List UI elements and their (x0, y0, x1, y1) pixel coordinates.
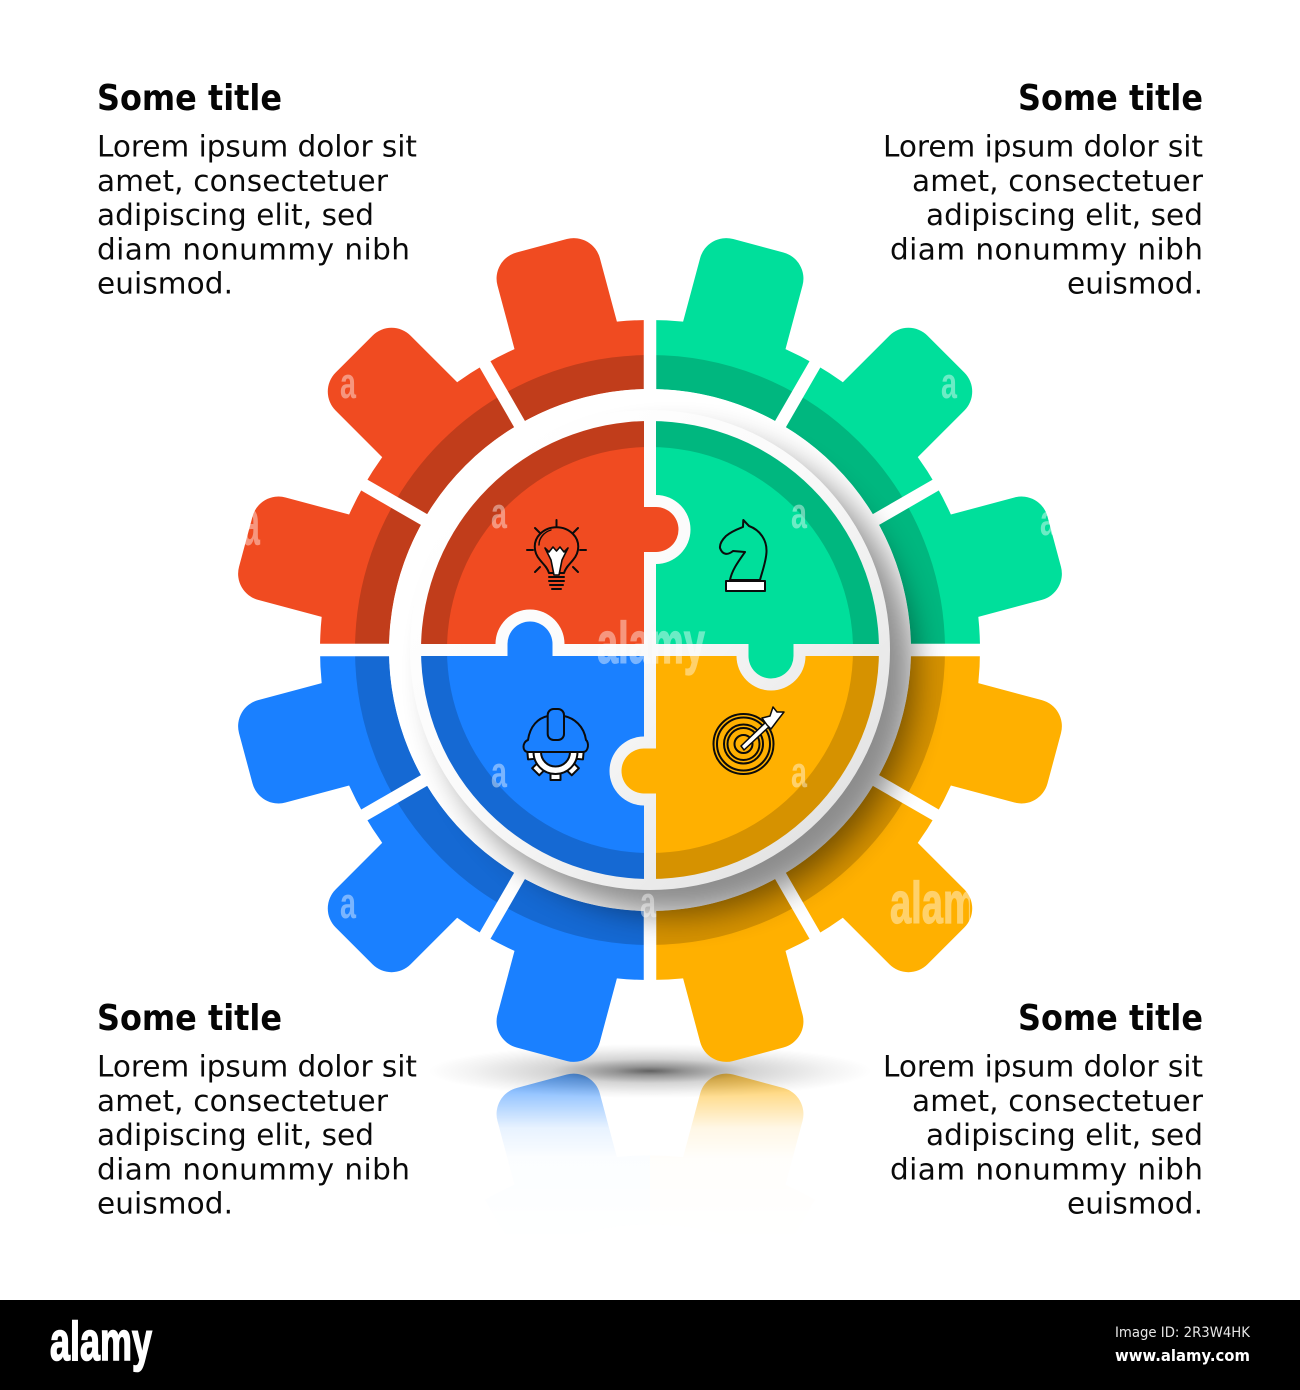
body text: amet, consectetuer (97, 164, 389, 198)
body text: amet, consectetuer (912, 1084, 1204, 1118)
watermarks: a (340, 359, 356, 408)
gear reflection (496, 1074, 804, 1152)
body text (97, 130, 417, 301)
watermarks: a (941, 359, 957, 408)
body text: amet, consectetuer (97, 1084, 389, 1118)
footer logo: alamy (50, 1310, 152, 1372)
puzzle circle (418, 418, 882, 882)
body text (97, 1050, 417, 1221)
gear quadrant: yellow (633, 633, 1076, 1076)
body text: diam nonummy nibh (890, 1152, 1203, 1186)
central disc (410, 410, 890, 890)
watermarks: a (1040, 496, 1056, 545)
puzzle tab: green (748, 640, 794, 678)
puzzle tab: yellow (622, 748, 660, 794)
gear quadrant: red (224, 224, 667, 667)
puzzle piece: blue (421, 650, 650, 879)
icon: helmet with gear (524, 709, 588, 780)
body text: diam nonummy nibh (890, 232, 1203, 266)
puzzle piece: yellow (650, 650, 879, 879)
gear ring (224, 224, 1076, 1076)
text block: bottom left (97, 998, 417, 1221)
footer bar (0, 1300, 1300, 1390)
heading: Some title (1018, 998, 1203, 1039)
body text: adipiscing elit, sed (926, 198, 1203, 232)
icon: target with arrow (714, 707, 784, 774)
puzzle tab: red (640, 507, 678, 552)
footer image id: Image ID: 2R3W4HK (1115, 1325, 1250, 1341)
body text: Lorem ipsum dolor sit (883, 130, 1203, 164)
watermarks: a (242, 485, 261, 559)
icon: chess knight (720, 520, 767, 591)
text block: top left (97, 78, 417, 301)
body text: Lorem ipsum dolor sit (97, 130, 417, 164)
heading: Some title (97, 998, 282, 1039)
heading: Some title (1018, 78, 1203, 119)
body text (883, 130, 1204, 301)
disc drop shadow (435, 435, 915, 915)
floor shadow (428, 1044, 872, 1098)
puzzle piece: red (421, 421, 650, 650)
watermarks: a (791, 489, 807, 538)
text block: top right (883, 78, 1204, 301)
icon: light bulb (527, 520, 586, 589)
gear quadrant: green (633, 224, 1076, 667)
body text (883, 1050, 1204, 1221)
body text: diam nonummy nibh (97, 1152, 410, 1186)
body text: adipiscing elit, sed (97, 198, 374, 232)
watermarks: a (791, 748, 807, 797)
watermarks: a (491, 489, 507, 538)
watermarks: a (491, 748, 507, 797)
watermarks: alamy (890, 871, 998, 936)
central white ring (389, 389, 911, 911)
body text: adipiscing elit, sed (97, 1118, 374, 1152)
body text: Lorem ipsum dolor sit (97, 1050, 417, 1084)
footer url: www.alamy.com (1115, 1346, 1250, 1365)
heading: Some title (97, 78, 282, 119)
watermarks: alamy (597, 611, 705, 676)
puzzle piece: green (650, 421, 879, 650)
body text: euismod. (1067, 267, 1203, 301)
body text: euismod. (97, 1187, 233, 1221)
body text: diam nonummy nibh (97, 232, 410, 266)
puzzle tab: blue (508, 622, 552, 660)
body text: adipiscing elit, sed (926, 1118, 1203, 1152)
watermarks (242, 359, 1056, 936)
body text: Lorem ipsum dolor sit (883, 1050, 1203, 1084)
text block: bottom right (883, 998, 1204, 1221)
gear quadrant: blue (224, 633, 667, 1076)
watermarks: a (340, 879, 356, 928)
body text: euismod. (1067, 1187, 1203, 1221)
body text: euismod. (97, 267, 233, 301)
body text: amet, consectetuer (912, 164, 1204, 198)
watermarks: a (640, 878, 656, 927)
